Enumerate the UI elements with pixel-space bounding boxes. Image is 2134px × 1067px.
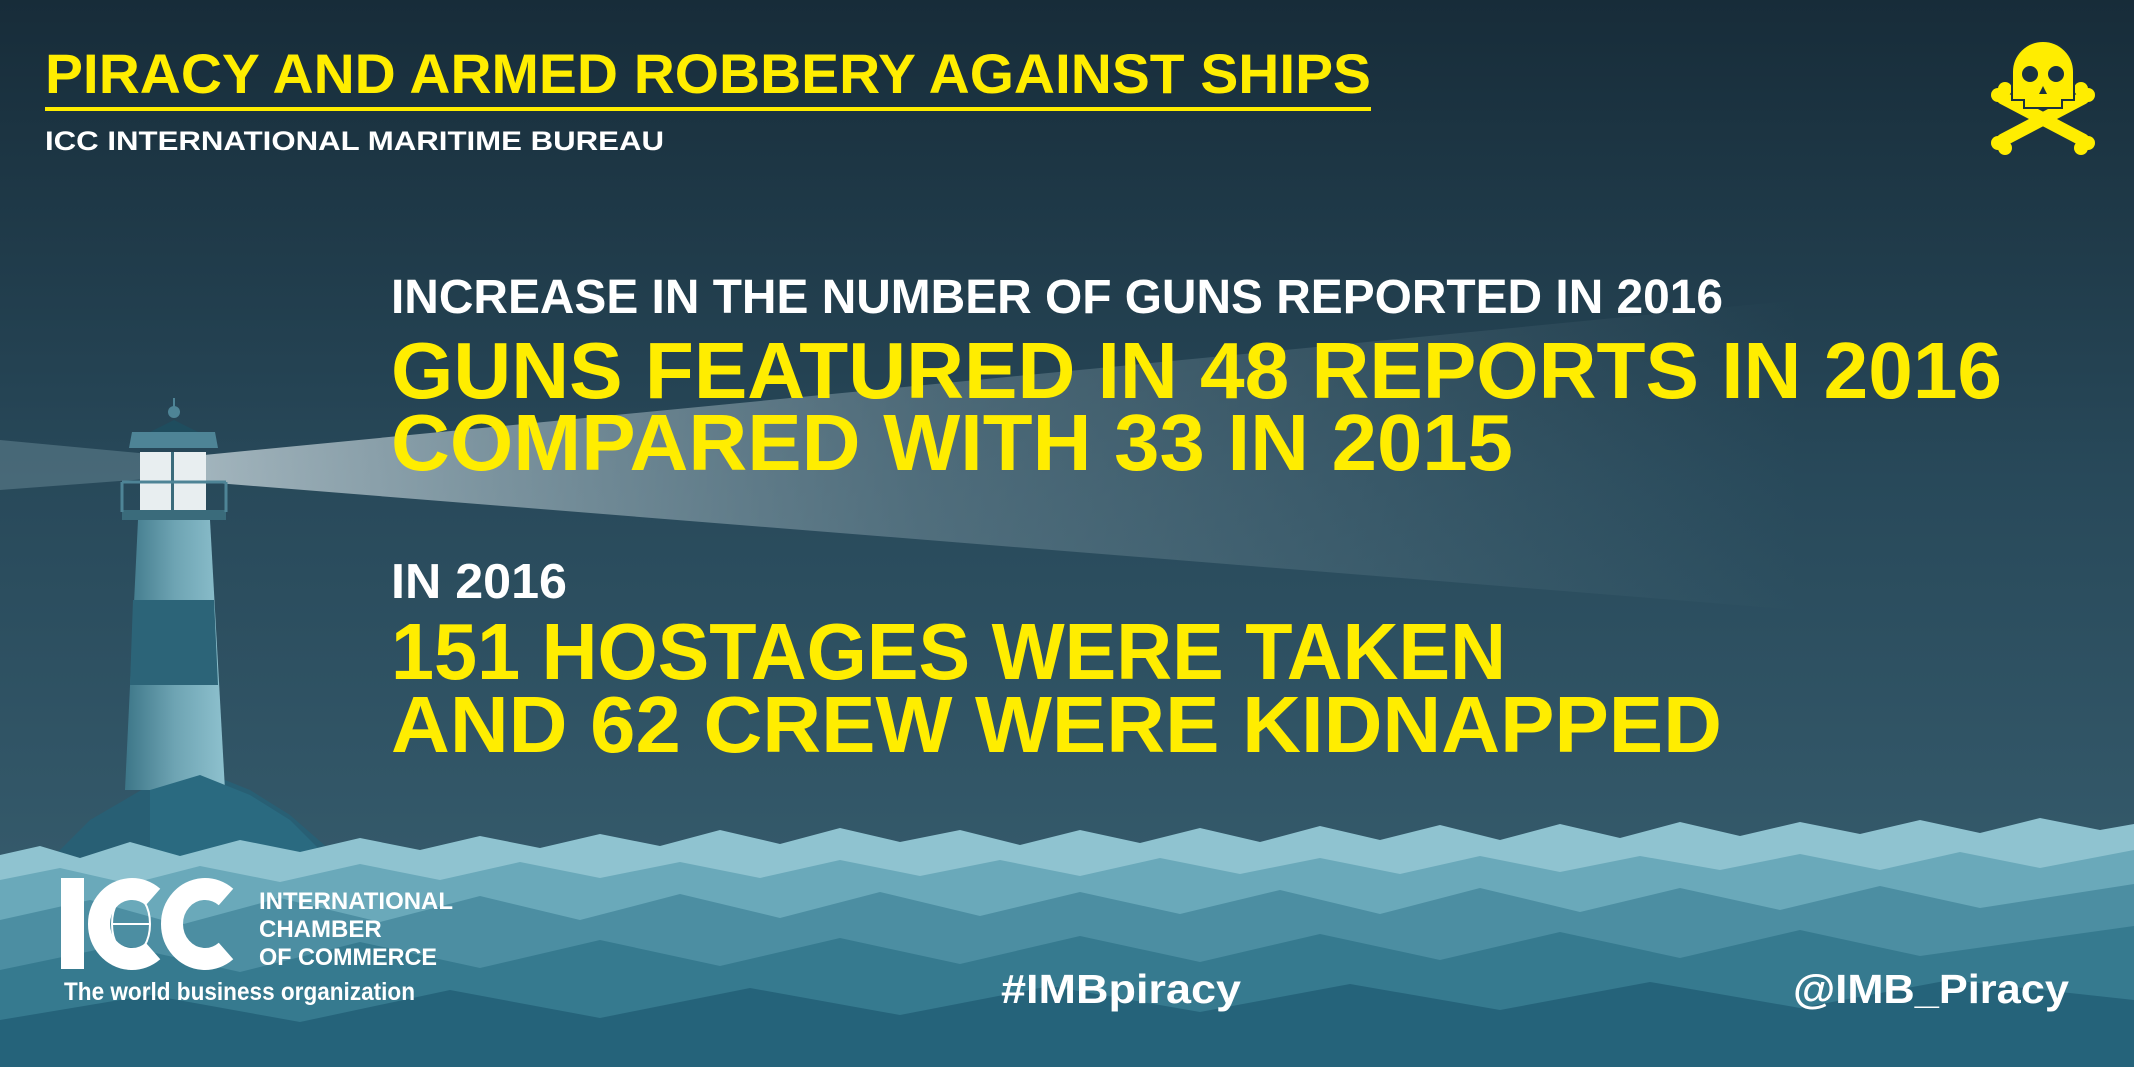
logo: ICC: OF COMMERCE [259,944,437,971]
text block: guns [391,271,2002,487]
hashtag: #IMBpiracy [1001,966,1241,1012]
waves [0,818,2134,1067]
text block: hostages: AND 62 CREW WERE KIDNAPPED [391,680,1722,769]
logo: ICC: INTERNATIONAL [259,888,453,915]
title: PIRACY AND ARMED ROBBERY AGAINST SHIPS [45,42,1371,105]
text block: hostages: 151 HOSTAGES WERE TAKEN [391,607,1506,696]
logo: ICC [61,878,453,1006]
logo: ICC: CHAMBER [259,916,382,943]
text block: guns: INCREASE IN THE NUMBER OF GUNS REPORTED IN 2016 [391,271,1723,324]
logo: ICC: The world business organization [64,978,415,1006]
icon: skull and crossbones [1991,41,2095,155]
text block: guns: COMPARED WITH 33 IN 2015 [391,398,1513,487]
text block: guns: GUNS FEATURED IN 48 REPORTS IN 2016 [391,326,2002,415]
text block: hostages: IN 2016 [391,555,567,609]
lighthouse [40,398,340,870]
twitter handle: @IMB_Piracy [1793,966,2069,1012]
subtitle: ICC INTERNATIONAL MARITIME BUREAU [45,126,664,156]
light beam [0,300,1800,610]
text block: hostages [391,555,1722,769]
